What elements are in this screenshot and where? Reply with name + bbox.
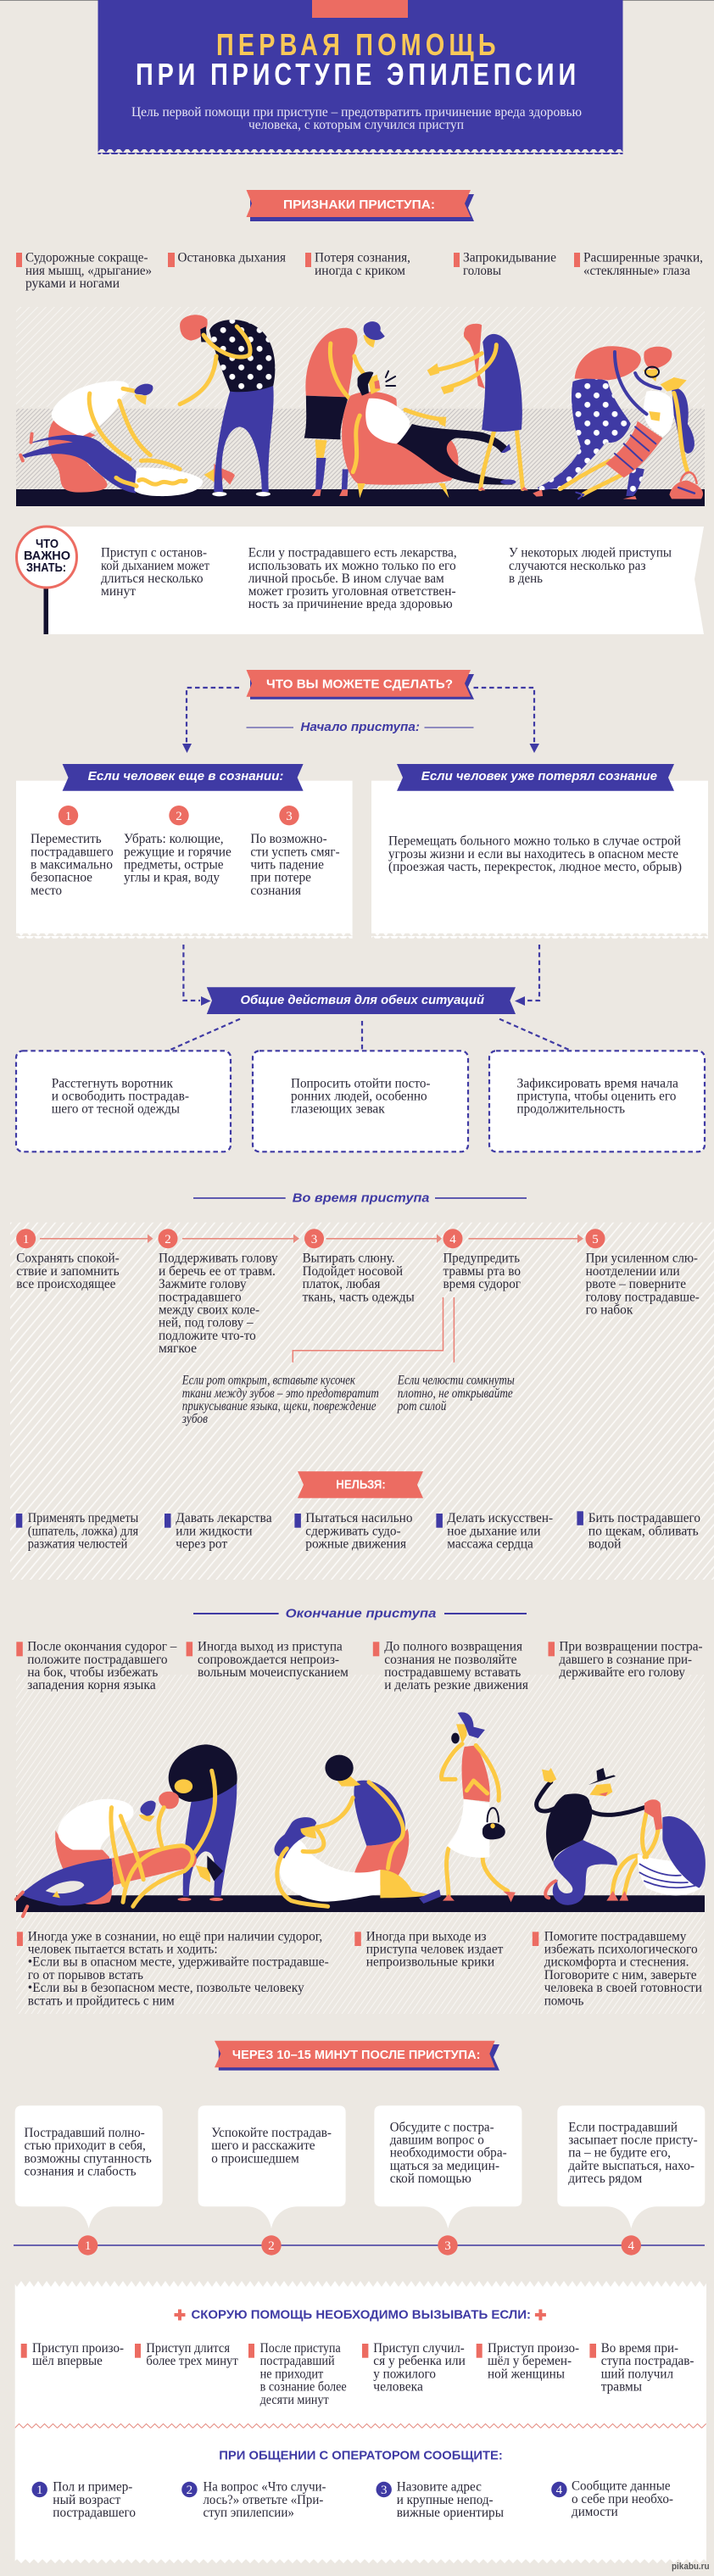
forbidden 1: разжатия челюстей xyxy=(28,1536,127,1552)
forbidden 2: Давать лекарства xyxy=(176,1511,272,1525)
timeline line xyxy=(14,2244,705,2246)
forbidden 1 xyxy=(16,1511,139,1552)
figure: man bending over victim xyxy=(48,381,153,493)
operator item 3: вижные ориентиры xyxy=(397,2506,505,2520)
step 1: 1 xyxy=(65,810,71,823)
forbidden 2: через рот xyxy=(176,1536,227,1552)
reason 1 xyxy=(21,2341,124,2368)
caption 3: дискомфорта и стеснения. xyxy=(544,1955,689,1970)
step 3: По возможно- xyxy=(250,832,327,846)
text: column 1: длиться несколько xyxy=(101,572,204,586)
reason 3: После приступа xyxy=(260,2341,341,2356)
operator item 3: Назовите адрес xyxy=(397,2480,482,2495)
step 2: 2 xyxy=(165,1233,171,1246)
connectors: dashed lines to boxes xyxy=(170,1019,569,1050)
text: column 3: У некоторых людей приступы xyxy=(509,546,672,560)
signs list xyxy=(16,251,703,291)
operator item 1: Пол и пример- xyxy=(53,2480,132,2495)
bubble 2: шего и расскажите xyxy=(211,2138,315,2153)
forbidden 5: водой xyxy=(588,1536,621,1552)
reason 1: Приступ произо- xyxy=(32,2341,124,2356)
step 2: ней, под голову – xyxy=(159,1316,254,1330)
reason 2: Приступ длится xyxy=(146,2341,230,2356)
heading: tell the operator: ПРИ ОБЩЕНИИ С ОПЕРАТОРОМ СООБЩИТЕ: xyxy=(219,2449,503,2463)
reason 6: ступа пострадав- xyxy=(601,2354,694,2368)
end item 3: сознания не позволяйте xyxy=(384,1653,517,1667)
after-seizure captions xyxy=(17,1929,702,2008)
step 5: 5 xyxy=(592,1233,599,1246)
title xyxy=(136,27,576,92)
box: bystanders: Попросить отойти посто- xyxy=(291,1076,431,1090)
end item 3: и делать резкие движения xyxy=(384,1678,528,1692)
step 1 xyxy=(16,1229,120,1291)
reason 5: Приступ произо- xyxy=(488,2341,579,2356)
note: mouth open: Если рот открыт, вставьте кусочек xyxy=(181,1374,356,1388)
reason 4: человека xyxy=(373,2380,423,2395)
sign 1 xyxy=(16,251,152,291)
step 4: 4 xyxy=(449,1233,456,1246)
text: moving the patient: Перемещать больного можно только в случае острой xyxy=(388,834,681,849)
caption 1: Иногда уже в сознании, но ещё при наличии судорог, xyxy=(28,1929,322,1943)
step 1 xyxy=(31,806,114,898)
sign 3: иногда с криком xyxy=(315,264,405,278)
note: mouth open xyxy=(181,1374,379,1426)
text: column 1: Приступ с останов- xyxy=(101,546,207,560)
reason 3: пострадавший xyxy=(260,2354,335,2368)
sign 4: Запрокидывание xyxy=(463,251,556,265)
sign 3 xyxy=(305,251,410,278)
step 3: чить падение xyxy=(250,858,324,872)
caption 2: приступа человек издает xyxy=(366,1942,504,1957)
forbidden 4: Делать искусствен- xyxy=(447,1511,553,1525)
step 1: в максимально xyxy=(31,858,113,872)
connector lines to notes xyxy=(293,1297,454,1363)
caption 1: го от порывов встать xyxy=(28,1968,143,1982)
subtitle: Цель первой помощи при приступе – предотвратить причинение вреда здоровью xyxy=(131,105,582,120)
bubble 3: ской помощью xyxy=(390,2172,471,2186)
end item 4: держивайте его голову xyxy=(559,1665,685,1680)
step 2: пострадавшего xyxy=(159,1290,242,1304)
note: jaws closed xyxy=(397,1374,515,1413)
icon: round sign: ЧТО xyxy=(36,537,59,551)
illustration: people during a seizure xyxy=(16,307,705,506)
reason 4: ся у ребенка или xyxy=(373,2354,466,2368)
arrow: dashed to common actions left xyxy=(183,945,211,1006)
end item 3: пострадавшему вставать xyxy=(384,1665,521,1680)
arrow: dashed right xyxy=(473,688,539,753)
step 4: травмы рта во xyxy=(443,1264,521,1279)
title: ПРИ ПРИСТУПЕ ЭПИЛЕПСИИ xyxy=(136,57,576,92)
step 2: режущие и горячие xyxy=(124,845,231,859)
caption 3: человека в своей готовности xyxy=(544,1981,702,1995)
step 2: Зажмите голову xyxy=(159,1277,247,1291)
step 3: ткань, часть одежды xyxy=(303,1290,415,1304)
panel: still conscious xyxy=(16,764,353,939)
figure: woman holding chair xyxy=(304,321,385,496)
figure: standing person in polka dots xyxy=(180,315,275,496)
bubble 2 xyxy=(198,2105,346,2255)
forbidden 4: ное дыхание или xyxy=(447,1524,540,1538)
operator item 4: димости xyxy=(572,2505,618,2519)
figure: woman sitting on the floor xyxy=(274,1817,441,1906)
forbidden 3: сдерживать судо- xyxy=(305,1524,401,1538)
sign 5 xyxy=(574,251,703,278)
end item 2: Иногда выход из приступа xyxy=(198,1640,343,1654)
box: bystanders: глазеющих зевак xyxy=(291,1102,385,1117)
banner: 10-15 minutes after: ЧЕРЕЗ 10–15 МИНУТ ПОСЛЕ ПРИСТУПА: xyxy=(232,2048,480,2062)
reason 4: Приступ случил- xyxy=(373,2341,465,2356)
bubble 3: Обсудите с постра- xyxy=(390,2120,494,2134)
panel: what is important to know xyxy=(17,527,704,634)
bubble 1: Пострадавший полно- xyxy=(24,2126,145,2140)
timeline arrows xyxy=(40,1235,583,1243)
text: column 2: личной просьбе. В ином случае вам xyxy=(248,572,444,586)
operator item 4 xyxy=(551,2479,673,2519)
arrow: dashed left xyxy=(182,688,239,753)
banner: common actions xyxy=(207,987,516,1014)
reason 6: травмы xyxy=(601,2380,643,2395)
panel: lost consciousness xyxy=(371,764,708,939)
caption 3 xyxy=(533,1929,702,2008)
bubble 4: дитесь рядом xyxy=(568,2172,642,2186)
bubble 4: Если пострадавший xyxy=(568,2120,678,2134)
figure: person in dark top xyxy=(159,1744,237,1901)
banner: must not: НЕЛЬЗЯ: xyxy=(336,1478,386,1492)
reason 4 xyxy=(362,2341,466,2395)
panel: ambulance and operator xyxy=(15,2281,706,2563)
icon: round sign xyxy=(17,527,76,634)
end item 1: на бок, чтобы избежать xyxy=(27,1665,158,1680)
reason 5: шёл у беремен- xyxy=(488,2354,572,2368)
bubble 2: Успокойте пострадав- xyxy=(211,2126,332,2140)
banner: conscious xyxy=(63,764,304,791)
forbidden 4: массажа сердца xyxy=(447,1536,533,1552)
caption 1 xyxy=(17,1929,329,2008)
watermark: pikabu.ru xyxy=(672,2562,710,2572)
text: column 3 xyxy=(509,546,672,586)
text: column 2 xyxy=(248,546,457,611)
step 2 xyxy=(124,806,231,885)
bubble 3: щаться за медицин- xyxy=(390,2159,499,2173)
step 5: го набок xyxy=(586,1302,633,1318)
step 2: углы и края, воду xyxy=(124,871,220,885)
step 3: Подойдет носовой xyxy=(303,1264,403,1279)
box: collar: шего от тесной одежды xyxy=(52,1102,181,1117)
bubble 4: 4 xyxy=(628,2239,635,2253)
bubble 3: 3 xyxy=(444,2239,451,2253)
banner: must not xyxy=(298,1471,423,1498)
forbidden 5: Бить пострадавшего xyxy=(588,1511,700,1525)
step 3: Вытирать слюну. xyxy=(303,1252,395,1266)
forbidden 3: рожные движения xyxy=(305,1536,406,1552)
reason 5 xyxy=(477,2341,579,2381)
reason 6: ший получил xyxy=(601,2367,673,2381)
box: bystanders: ронних людей, особенно xyxy=(291,1089,427,1104)
reason 3: в сознание более xyxy=(260,2380,347,2395)
step 3: сознания xyxy=(250,884,301,898)
figure: armchair with person xyxy=(342,371,516,498)
reason 6: Во время при- xyxy=(601,2341,678,2356)
sign 1: руками и ногами xyxy=(25,276,120,291)
step 2: и беречь ее от травм. xyxy=(159,1264,276,1279)
operator item 3 xyxy=(377,2480,505,2520)
text: column 2: использовать их можно только по его xyxy=(248,559,456,573)
step 2: между своих коле- xyxy=(159,1302,259,1318)
box: note the time: приступа, чтобы оценить его xyxy=(517,1089,677,1104)
note: jaws closed: рот силой xyxy=(397,1399,447,1413)
panel: during steps with hatch xyxy=(10,1223,714,1580)
figure: couple with bag xyxy=(533,346,703,499)
end item 1: западения корня языка xyxy=(27,1678,156,1692)
caption 1: человек пытается встать и ходить: xyxy=(28,1942,218,1957)
step 4: время судорог xyxy=(443,1277,521,1291)
caption 1: встать и пройдитесь с ним xyxy=(28,1993,175,2008)
banner: signs of a seizure xyxy=(246,190,474,221)
step 1: место xyxy=(31,884,62,898)
text: column 1 xyxy=(101,546,209,599)
end item 2: сопровождается непроиз- xyxy=(198,1653,339,1667)
bubble 1 xyxy=(15,2105,163,2255)
arrow: dashed to common actions right xyxy=(515,945,539,1006)
operator item 4: 4 xyxy=(556,2484,563,2497)
figure: woman in blue dress xyxy=(427,324,528,490)
bubble 4: па – не будите его, xyxy=(568,2146,671,2161)
text: column 2: может грозить уголовная ответствен- xyxy=(248,584,456,599)
banner: unconscious: Если человек уже потерял сознание xyxy=(421,769,657,783)
operator item 1: 1 xyxy=(36,2484,42,2497)
step 3: 3 xyxy=(286,810,293,823)
sign 5: «стеклянные» глаза xyxy=(583,264,690,278)
illustration: after the seizure xyxy=(16,1712,706,1916)
bubble 1: 1 xyxy=(85,2239,91,2253)
caption 2 xyxy=(354,1929,504,1970)
forbidden 3: Пытаться насильно xyxy=(305,1511,413,1525)
step 4: Предупредить xyxy=(443,1252,520,1266)
banner: signs of a seizure: ПРИЗНАКИ ПРИСТУПА: xyxy=(283,198,435,212)
operator item 2 xyxy=(181,2480,326,2520)
forbidden 1: (шпатель, ложка) для xyxy=(28,1524,138,1538)
heading: end of the seizure: Окончание приступа xyxy=(286,1607,436,1621)
operator item 2: На вопрос «Что случи- xyxy=(204,2480,326,2495)
end item 4 xyxy=(548,1640,703,1680)
bubble 3: необходимости обра- xyxy=(390,2146,507,2161)
step 1: безопасное xyxy=(31,871,92,885)
end item 3 xyxy=(373,1640,528,1692)
box: bystanders xyxy=(253,1051,468,1151)
operator item 1 xyxy=(32,2480,136,2520)
figure: helper with dark curly hair xyxy=(316,1755,409,1888)
bubble 2: 2 xyxy=(268,2239,275,2253)
reason 3 xyxy=(248,2341,347,2407)
step 2: Поддерживать голову xyxy=(159,1252,278,1266)
banner: 10-15 minutes after xyxy=(215,2041,499,2071)
subtitle xyxy=(131,105,582,132)
forbidden 5: по щекам, обливать xyxy=(588,1524,699,1538)
bubble 3 xyxy=(374,2105,522,2255)
sign 2: Остановка дыхания xyxy=(178,251,286,265)
operator item 3: и крупные непод- xyxy=(397,2493,494,2507)
box: note the time: продолжительность xyxy=(517,1102,625,1117)
reason 1: шёл впервые xyxy=(32,2354,103,2368)
figure: woman crouching xyxy=(606,1799,706,1901)
end item 1: положите пострадавшего xyxy=(27,1653,168,1667)
note: mouth open: зубов xyxy=(181,1412,208,1426)
operator item 2: лось?» ответьте «При- xyxy=(204,2493,323,2507)
step 3: сти успеть смяг- xyxy=(250,845,340,859)
forbidden 2: или жидкости xyxy=(176,1524,253,1538)
bubble 1: сознания и слабость xyxy=(24,2165,137,2179)
bubble 2: о происшедшем xyxy=(211,2151,299,2166)
header panel xyxy=(98,0,622,154)
banner: unconscious xyxy=(397,764,674,791)
box: collar: и освободить пострадав- xyxy=(52,1089,189,1104)
end item 2 xyxy=(187,1640,349,1680)
caption 2: непроизвольные крики xyxy=(366,1955,494,1970)
icon: round sign: ЗНАТЬ: xyxy=(26,560,66,575)
operator item 4: Сообщите данные xyxy=(572,2479,671,2494)
end item 2: вольным мочеиспусканием xyxy=(198,1665,349,1680)
end list xyxy=(16,1640,703,1692)
step 1: все происходящее xyxy=(16,1277,116,1291)
bubble 4: засыпает после присту- xyxy=(568,2133,698,2147)
bubble 1: возможны спутанность xyxy=(24,2151,152,2166)
step 3 xyxy=(303,1229,415,1304)
step 5: При усиленном слю- xyxy=(586,1252,698,1266)
figure: man in hat comforting xyxy=(537,1768,644,1905)
title: ПЕРВАЯ ПОМОЩЬ xyxy=(216,27,496,62)
hatched background: end of seizure xyxy=(16,1675,705,2014)
banner: common actions: Общие действия для обеих ситуаций xyxy=(241,993,484,1007)
step 5 xyxy=(585,1229,700,1318)
heading: seizure start: Начало приступа: xyxy=(300,720,420,734)
banner: conscious: Если человек еще в сознании: xyxy=(88,769,284,783)
operator item 1: пострадавшего xyxy=(53,2506,136,2520)
reason 2 xyxy=(135,2341,238,2368)
caption 3: Поговорите с ним, заверьте xyxy=(544,1968,697,1982)
step 1: пострадавшего xyxy=(31,845,114,859)
reason 4: у пожилого xyxy=(373,2367,436,2381)
step 2: предметы, острые xyxy=(124,858,224,872)
step 5: рвоте – поверните xyxy=(586,1277,686,1291)
step 2: Убрать: колющие, xyxy=(124,832,224,846)
box: collar xyxy=(16,1051,231,1151)
step 5: голову пострадавше- xyxy=(586,1290,700,1304)
operator item 2: 2 xyxy=(187,2484,192,2497)
forbidden 3 xyxy=(294,1511,413,1552)
caption 2: Иногда при выходе из xyxy=(366,1929,487,1943)
box: note the time xyxy=(489,1051,705,1151)
bubble 4 xyxy=(557,2105,705,2255)
caption 3: помочь xyxy=(544,1993,583,2008)
step 3: при потере xyxy=(250,871,311,885)
text: moving the patient xyxy=(388,834,682,874)
operator item 2: ступ эпилепсии» xyxy=(204,2506,294,2520)
icon: round sign: ВАЖНО xyxy=(24,549,70,563)
sign 4 xyxy=(454,251,556,278)
forbidden 5 xyxy=(577,1511,700,1552)
operator item 4: о себе при необхо- xyxy=(572,2492,673,2506)
figure: victim lying on floor xyxy=(20,434,235,496)
step 2 xyxy=(158,1229,278,1356)
end item 4: При возвращении постра- xyxy=(559,1640,703,1654)
text: moving the patient: (проезжая часть, перекресток, людное место, обрыв) xyxy=(388,860,682,874)
end item 1 xyxy=(16,1640,177,1692)
banner: what you can do: ЧТО ВЫ МОЖЕТЕ СДЕЛАТЬ? xyxy=(266,677,453,692)
operator item 1: ный возраст xyxy=(53,2493,121,2507)
box: collar: Расстегнуть воротник xyxy=(52,1076,173,1090)
figure: person being helped up xyxy=(16,1808,223,1916)
sign 5: Расширенные зрачки, xyxy=(583,251,703,265)
step 1: 1 xyxy=(23,1233,29,1246)
step 4 xyxy=(443,1229,521,1291)
caption 1: •Если вы в опасном месте, удерживайте пострадавше- xyxy=(28,1955,329,1970)
bubble 4: дайте выспаться, нахо- xyxy=(568,2159,694,2173)
sign 4: головы xyxy=(463,264,502,278)
forbidden 1: Применять предметы xyxy=(28,1511,139,1525)
end item 1: После окончания судорог – xyxy=(27,1640,177,1654)
caption 3: избежать психологического xyxy=(544,1942,698,1957)
figure: woman walking with phone and bag xyxy=(442,1712,516,1902)
text: column 2: Если у пострадавшего есть лекарства, xyxy=(248,546,457,560)
banner: what you can do xyxy=(246,670,474,700)
bubble 1: стью приходит в себя, xyxy=(24,2138,146,2153)
heading: during the seizure: Во время приступа xyxy=(293,1191,429,1206)
caption 1: •Если вы в безопасном месте, позвольте человеку xyxy=(28,1981,304,1995)
step 1: Сохранять спокой- xyxy=(16,1252,120,1266)
sign 1: Судорожные сокраще- xyxy=(25,251,148,265)
subtitle: человека, с которым случился приступ xyxy=(248,118,464,132)
text: column 1: кой дыханием может xyxy=(101,559,209,573)
sign 3: Потеря сознания, xyxy=(315,251,410,265)
text: column 3: в день xyxy=(509,572,543,586)
figure: helper in white top xyxy=(55,1799,156,1904)
end item 3: До полного возвращения xyxy=(384,1640,522,1654)
step 3: платок, любая xyxy=(303,1277,380,1291)
note: mouth open: ткани между зубов – это предотвратит xyxy=(182,1386,379,1401)
reason 6 xyxy=(589,2341,694,2395)
reason 5: ной женщины xyxy=(488,2367,565,2381)
step 2: подложите что-то xyxy=(159,1329,256,1343)
forbidden 4 xyxy=(436,1511,553,1552)
text: moving the patient: угрозы жизни и если вы находитесь в опасном месте xyxy=(388,847,678,861)
bubble 3: давшим вопрос о xyxy=(390,2133,484,2147)
step 5: ноотделении или xyxy=(586,1264,680,1279)
text: column 1: минут xyxy=(101,584,136,599)
note: jaws closed: плотно, не открывайте xyxy=(398,1386,513,1401)
operator item 3: 3 xyxy=(381,2484,387,2497)
step 3: 3 xyxy=(311,1233,317,1246)
reason 2: более трех минут xyxy=(146,2354,238,2368)
text: column 3: случаются несколько раз xyxy=(509,559,646,573)
caption 3: Помогите пострадавшему xyxy=(544,1929,687,1943)
note: jaws closed: Если челюсти сомкнуты xyxy=(397,1374,515,1388)
step 2: 2 xyxy=(176,810,182,823)
end item 4: давшего в сознание при- xyxy=(559,1653,692,1667)
forbidden 2 xyxy=(165,1511,272,1552)
reason 3: десяти минут xyxy=(260,2393,329,2407)
box: note the time: Зафиксировать время начала xyxy=(517,1076,678,1090)
step 1: ствие и запомнить xyxy=(16,1264,120,1279)
heading: call ambulance: СКОРУЮ ПОМОЩЬ НЕОБХОДИМО ВЫЗЫВАТЬ ЕСЛИ: xyxy=(192,2307,531,2322)
reason 3: не приходит xyxy=(260,2367,324,2381)
text: column 2: ность за причинение вреда здоровью xyxy=(248,597,453,611)
note: mouth open: прикусывание языка, щеки, повреждение xyxy=(182,1399,377,1413)
step 3 xyxy=(250,806,340,898)
step 2: мягкое xyxy=(159,1341,197,1356)
sign 1: ния мышц, «дрыгание» xyxy=(25,264,152,278)
step 1: Переместить xyxy=(31,832,102,846)
